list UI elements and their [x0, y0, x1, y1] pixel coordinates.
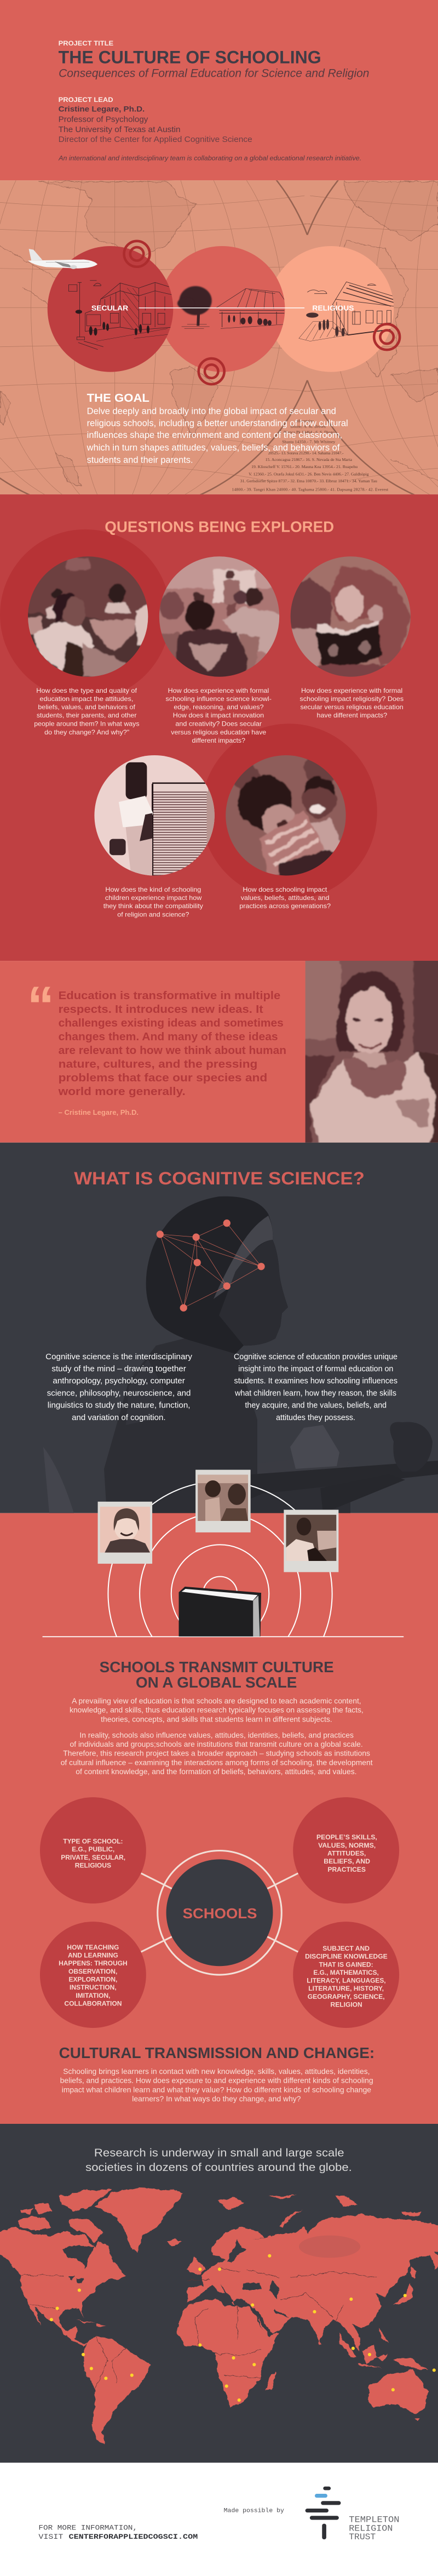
question 3: How does experience with formal [301, 687, 402, 694]
question 2: schooling influence science knowl- [166, 695, 272, 703]
vintage map background [0, 180, 438, 494]
illustration: open-air school and tree [177, 286, 285, 328]
accent circle: top left [0, 529, 170, 700]
map legend text: 20525.- 13. Sorava 21290.- 14. Sahama 21047.- [268, 451, 344, 455]
label: secular: SECULAR [91, 304, 129, 312]
question 5: practices across generations? [239, 902, 331, 910]
diagram: schools hub and spokes [40, 1797, 399, 2103]
text: definition of cognitive science: linguistics to study the nature, function, [48, 1401, 190, 1410]
goal text: students and their parents. [87, 455, 193, 465]
target marker: north [124, 241, 149, 267]
photo: microscope and book [94, 755, 216, 877]
question 1: people around them? In what ways [34, 720, 140, 727]
bubble: subject and discipline knowledge: LITERACY, LANGUAGES, [307, 1977, 386, 1984]
heading: research is underway: societies in dozens of countries around the globe. [85, 2162, 352, 2174]
text: definition of cognitive science: and variation of cognition. [72, 1414, 166, 1422]
panel: what is cognitive science [0, 1143, 438, 1513]
photo: student in classroom [28, 556, 148, 677]
icon: quotation mark: “ [27, 976, 54, 1036]
panel: global research map [0, 2124, 438, 2463]
text: cultural transmission: beliefs, and practices. How does exposure to and experience with different kinds of schooling [60, 2077, 373, 2085]
bubble: people's skills: ATTITUDES, [327, 1850, 366, 1857]
bubble: how teaching and learning happens: IMITATION, [76, 1992, 111, 1999]
map legend text: Mountains [296, 418, 314, 423]
quote text: are relevant to how we think about human [59, 1045, 286, 1057]
question 2: edge, reasoning, and values? [174, 703, 264, 711]
photo: father and laughing child [226, 755, 346, 876]
vintage map continents [0, 182, 438, 487]
question 2: versus religious education have [171, 728, 267, 736]
question 1: beliefs, values, and behaviors of [38, 703, 136, 711]
bubble: type of school: E.G., PUBLIC, [72, 1846, 114, 1853]
text: schools influence values: Therefore, this research project takes a broader approach – studying schools as institutions [63, 1749, 370, 1758]
map legend text: 15. Aconcagua 21867.- 16. S. Nevada de Sta Marta [266, 457, 352, 462]
goal text [87, 407, 348, 465]
panel: vintage world map with school types [0, 180, 438, 494]
bubble: how teaching and learning happens [40, 1922, 146, 2028]
bubble: subject and discipline knowledge: THAT IS GAINED: [319, 1961, 373, 1968]
project lead details: Director of the Center for Applied Cognitive Science [59, 135, 252, 144]
heading: schools transmit culture: ON A GLOBAL SCALE [136, 1674, 297, 1691]
bubble: people's skills: VALUES, NORMS, [318, 1842, 376, 1849]
text: for more information [38, 2523, 198, 2541]
photo card: smiling girl [98, 1502, 152, 1564]
text: for more information: CENTERFORAPPLIEDCOGSCI.COM [69, 2533, 198, 2541]
bubble: subject and discipline knowledge [293, 1922, 399, 2028]
map legend text: 1. Blanca Pk 14464.- 6. S. Diego [279, 430, 335, 435]
text: definition of cognitive science: anthropology, psychology, computer [53, 1377, 185, 1386]
heading: schools transmit culture: SCHOOLS TRANSMIT CULTURE [100, 1659, 334, 1675]
question 2 [166, 687, 272, 744]
bubble: type of school [40, 1797, 146, 1903]
text: cognitive science of education: Cognitive science of education provides unique [234, 1353, 397, 1361]
bubble: subject and discipline knowledge: E.G., MATHEMATICS, [313, 1969, 379, 1976]
question 5: values, beliefs, attitudes, and [241, 894, 330, 902]
quote text: problems that face our species and [59, 1072, 267, 1084]
photo: child reading religious book [290, 556, 411, 677]
heading: cultural transmission and change: CULTURAL TRANSMISSION AND CHANGE: [59, 2044, 374, 2061]
heading: research is underway: Research is underway in small and large scale [94, 2147, 344, 2159]
question 2: How does experience with formal [168, 687, 269, 694]
connector line [139, 307, 304, 309]
circle: mixed school [159, 246, 285, 372]
text: definition of cognitive science: Cognitive science is the interdisciplinary [45, 1353, 193, 1361]
text: prevailing view of education [70, 1697, 364, 1723]
bubble: how teaching and learning happens: INSTRUCTION, [70, 1984, 117, 1991]
heading: the goal: THE GOAL [87, 391, 149, 404]
seas overlay [63, 2239, 288, 2336]
question 2: and creativity? Does secular [175, 720, 262, 727]
bubble: subject and discipline knowledge: LITERATURE, HISTORY, [308, 1985, 384, 1992]
photo: classroom with teacher [159, 556, 279, 677]
map legend text: Bonne; A. M. Brown [291, 424, 326, 429]
question 4: of religion and science? [117, 910, 189, 918]
project lead details: The University of Texas at Austin [59, 126, 181, 134]
question 3 [299, 687, 404, 719]
bubble: subject and discipline knowledge: SUBJECT AND [322, 1945, 370, 1952]
panel: header [0, 0, 438, 180]
panel: quote [0, 961, 438, 1143]
question 2: How does it impact innovation [173, 711, 264, 719]
question 4 [103, 886, 203, 918]
text: cognitive science of education [234, 1353, 397, 1422]
diagram: concentric rings from book [107, 1484, 333, 1637]
question 2: different impacts? [192, 737, 245, 744]
map legend text: 31. Gerlsdorfer Spitze 8737.- 32. Etna 10870.- 33. Elbruz 18471.- 34. Yaman Tau [240, 478, 377, 483]
country borders [21, 2269, 377, 2389]
question 5: How does schooling impact [243, 886, 327, 893]
project lead details: Professor of Psychology [59, 115, 148, 124]
label: religious: RELIGIOUS [312, 304, 354, 312]
goal text: influences shape the environment and content of the classroom, [87, 430, 342, 440]
baseline rule [43, 1635, 404, 1638]
bubble: how teaching and learning happens: AND LEARNING [68, 1952, 118, 1959]
bubble: people's skills: PEOPLE’S SKILLS, [316, 1834, 377, 1841]
icon: airplane [28, 249, 97, 269]
goal text: which in turn shapes attitudes, values, beliefs, and behaviors of [87, 443, 340, 453]
hub: schools: SCHOOLS [183, 1906, 257, 1922]
map legend text: V. 12360.- 25. Oræfa Jokul 6431.- 26. Ben Nevis 4406.- 27. Galdhöpig [249, 471, 369, 476]
icon: book [179, 1587, 261, 1637]
heading: research is underway [85, 2147, 352, 2174]
project lead details: Cristine Legare, Ph.D. [59, 105, 145, 114]
map texture [299, 2236, 360, 2258]
bubble: how teaching and learning happens: COLLABORATION [64, 2001, 122, 2008]
bubble: type of school: TYPE OF SCHOOL: [63, 1838, 123, 1845]
question 1: How does the type and quality of [36, 687, 137, 694]
panel: questions being explored [0, 494, 438, 961]
bubble: how teaching and learning happens: HOW TEACHING [67, 1944, 119, 1951]
team note: An international and interdisciplinary team is collaborating on a global educational research initiative. [58, 155, 361, 162]
quote text: challenges existing ideas and sometimes [59, 1017, 284, 1029]
text: cognitive science of education: insight into the impact of formal education on [238, 1365, 393, 1374]
bubble: people's skills [293, 1797, 399, 1903]
text: schools influence values [61, 1731, 373, 1776]
text: definition of cognitive science: study of the mind – drawing together [51, 1365, 186, 1374]
diagram: neural network on head [157, 1219, 265, 1312]
bubble: type of school: RELIGIOUS [75, 1862, 111, 1870]
bubble: subject and discipline knowledge: RELIGION [331, 2002, 362, 2009]
bubble: people's skills: PRACTICES [327, 1866, 366, 1873]
hub: schools [166, 1859, 273, 1966]
circle: secular school [48, 246, 173, 372]
subtitle: Consequences of Formal Education for Science and Religion [59, 67, 369, 79]
photo card: mother and child [195, 1470, 251, 1532]
illustration: secular school building [69, 281, 173, 350]
text: cognitive science of education: they acquire, and the values, beliefs, and [245, 1401, 387, 1410]
label: project lead: PROJECT LEAD [59, 96, 113, 104]
question 1: do they change? And why?" [44, 728, 129, 736]
text: schools influence values: of individuals and groups;schools are institutions that transmit culture on a global scale. [70, 1740, 363, 1748]
text: for more information: FOR MORE INFORMATION, [38, 2523, 137, 2532]
target marker: south [199, 358, 224, 384]
text: cognitive science of education: attitudes they possess. [276, 1414, 355, 1422]
bubble: people's skills: BELIEFS, AND [324, 1858, 370, 1865]
photo card: student in classroom [284, 1510, 338, 1572]
map legend text: Shasta 14350.- 7. Mt Whitney [282, 440, 335, 444]
heading: cognitive science: WHAT IS COGNITIVE SCIENCE? [74, 1168, 365, 1188]
text: definition of cognitive science: science, philosophy, neuroscience, and [47, 1389, 191, 1398]
quote text: Education is transformative in multiple [59, 990, 280, 1002]
text: cultural transmission: impact what children learn and what they value? How do different kinds of schooling change [62, 2085, 371, 2094]
text: for more information: VISIT [38, 2533, 63, 2541]
world map [0, 2188, 438, 2444]
question 3: have different impacts? [317, 711, 387, 719]
photo: silhouette of student at desk [43, 1196, 438, 1513]
text: cultural transmission [60, 2067, 373, 2103]
question 3: schooling impact religiosity? Does [299, 695, 404, 703]
text: schools influence values: In reality, schools also influence values, attitudes, identities, beliefs, and practices [79, 1731, 354, 1739]
question 1: education impact the attitudes, [39, 695, 133, 703]
bubble: subject and discipline knowledge: DISCIPLINE KNOWLEDGE [305, 1953, 388, 1960]
yellow research site markers [50, 2254, 436, 2402]
quote text [58, 990, 286, 1098]
logo: Templeton Religion Trust [306, 2487, 400, 2542]
map legend text: 19. Klioscheff V. 15761.- 20. Mauna Kea 13954.- 21. Ruapehu [251, 464, 358, 469]
text: cognitive science of education: students. It examines how schooling influences [234, 1377, 397, 1386]
logo: Templeton Religion Trust: TEMPLETON [349, 2515, 400, 2525]
text: prevailing view of education: A prevailing view of education is that schools are designed to teach academic content, [72, 1697, 361, 1705]
bubble: type of school: PRIVATE, SECULAR, [61, 1854, 125, 1861]
text: schools influence values: of content knowledge, and the formation of beliefs, behaviors, attitudes, and values. [76, 1768, 357, 1776]
heading: questions: QUESTIONS BEING EXPLORED [105, 518, 334, 535]
text: prevailing view of education: knowledge, and skills, thus education research typically focuses on assessing the facts, [70, 1706, 364, 1714]
question 4: they think about the compatibility [103, 902, 203, 910]
panel: schools transmit culture [0, 1470, 438, 2124]
quote text: world more generally. [58, 1086, 186, 1098]
quote attribution: – Cristine Legare, Ph.D. [59, 1108, 139, 1116]
question 1: students, their parents, and other [37, 711, 136, 719]
title: THE CULTURE OF SCHOOLING [59, 47, 321, 67]
quote text: respects. It introduces new ideas. It [59, 1004, 263, 1016]
map legend text [232, 418, 389, 492]
map legend text: 14800.- 39. Tangri Khan 24000.- 40. Taghama 25800.- 41. Dapsang 28278.- 42. Everest [232, 487, 389, 492]
illustration: religious school building [299, 282, 394, 341]
logo: Templeton Religion Trust: RELIGION [349, 2523, 393, 2533]
text: made possible by: Made possible by [224, 2508, 284, 2515]
logo: Templeton Religion Trust: TRUST [349, 2532, 376, 2542]
text: definition of cognitive science [45, 1353, 193, 1422]
photo: portrait of Cristine Legare [306, 961, 438, 1143]
bubble: subject and discipline knowledge: GEOGRAPHY, SCIENCE, [308, 1993, 385, 2001]
quote text: changes them. And many of these ideas [59, 1031, 278, 1043]
bubble: how teaching and learning happens: OBSERVATION, [68, 1968, 117, 1975]
target marker: east [374, 324, 400, 350]
project lead details [59, 105, 252, 144]
bubble: how teaching and learning happens: HAPPENS: THROUGH [59, 1960, 128, 1967]
label: project title: PROJECT TITLE [59, 39, 113, 47]
text: cognitive science of education: what children learn, how they reason, the skills [234, 1389, 396, 1398]
accent circle: lower right [201, 723, 377, 900]
question 1 [34, 687, 140, 736]
question 4: children experience impact how [105, 894, 202, 902]
text: prevailing view of education: theories, concepts, and skills that students learn in different subjects. [101, 1715, 332, 1723]
quote text: nature, cultures, and the pressing [59, 1058, 257, 1070]
panel: footer [0, 2463, 438, 2576]
heading: schools transmit culture [100, 1659, 334, 1691]
goal text: religious schools, including a better understanding of how cultural [87, 419, 348, 429]
text: schools influence values: of cultural influence – examining the interactions among forms of schooling, the development [61, 1758, 373, 1766]
bubble: how teaching and learning happens: EXPLORATION, [69, 1976, 117, 1983]
goal text: Delve deeply and broadly into the global impact of secular and [87, 407, 336, 417]
question 4: How does the kind of schooling [105, 886, 201, 893]
circle: religious school [268, 246, 394, 372]
question 3: secular versus religious education [300, 703, 404, 711]
text: cultural transmission: learners? In what ways do they change, and why? [132, 2095, 301, 2103]
question 5 [239, 886, 331, 910]
text: cultural transmission: Schooling brings learners in contact with new knowledge, skills, values, attitudes, identities, [63, 2067, 370, 2076]
